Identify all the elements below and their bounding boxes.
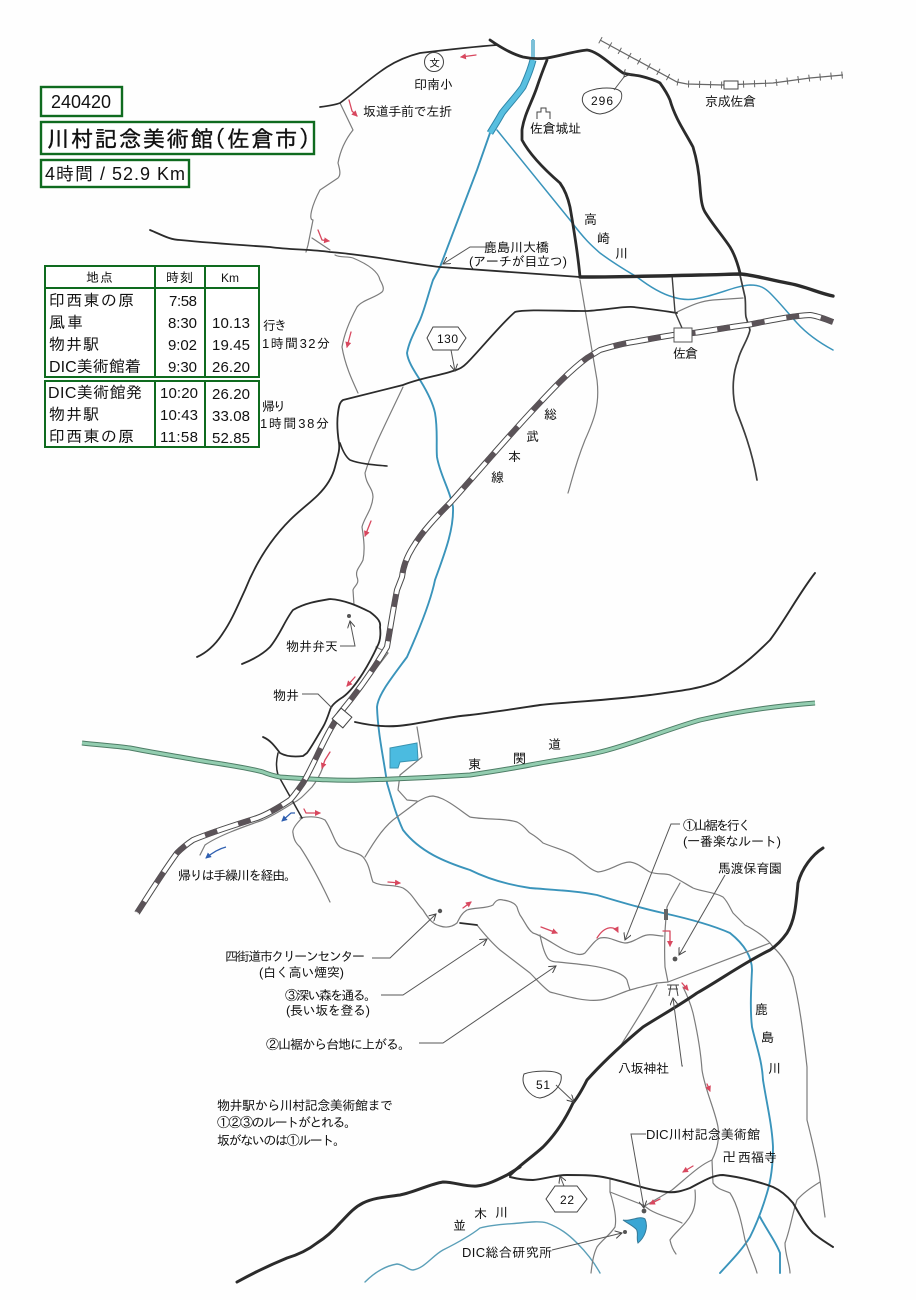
note: return time: 帰り [262, 399, 286, 414]
blue return arrows [206, 813, 295, 858]
map labels: 馬渡保育園 [718, 861, 782, 876]
table: trip log: 9:02 [168, 337, 197, 354]
table: trip log: 物井駅 [49, 406, 99, 424]
icon: Saifukuji temple: 卍 [722, 1149, 736, 1165]
note: outbound time: 1時間32分 [262, 336, 330, 351]
map labels: 西福寺 [738, 1150, 777, 1165]
map labels: 物井 [273, 688, 299, 703]
table: trip log: 11:58 [160, 429, 198, 446]
pond near Tokan road [390, 743, 418, 768]
table: trip log: 10:43 [160, 407, 198, 424]
rectangle: bridge [664, 909, 668, 920]
table: trip log: 33.08 [212, 408, 250, 425]
table: trip log: 52.85 [212, 430, 250, 447]
map labels: 帰りは手繰川を経由。 [178, 868, 297, 883]
table: trip log: 地点 [86, 270, 113, 285]
map labels: 川 [615, 246, 628, 261]
duration box: 4時間 / 52.9 Km [45, 164, 185, 184]
pond near DIC museum [623, 1218, 646, 1243]
map labels: 関 [513, 751, 526, 766]
map labels [178, 77, 782, 1260]
table: trip log: 印西東の原 [49, 429, 134, 446]
route 130 badge [427, 327, 466, 350]
river: Namiki river [365, 1222, 600, 1282]
station: Keisei Sakura [724, 81, 738, 89]
map labels: 坂道手前で左折 [363, 104, 452, 119]
route 51 badge: 51 [536, 1078, 550, 1092]
map labels: ②山裾から台地に上がる。 [266, 1037, 411, 1052]
markers: facility dots [347, 614, 677, 1234]
map labels: ①②③のルートがとれる。 [217, 1115, 357, 1130]
map labels: 鹿 [755, 1002, 768, 1017]
road: thin grey paths [200, 103, 825, 1273]
road: medium black roads [150, 45, 833, 1247]
map labels: 総 [544, 407, 557, 422]
map labels: 佐倉 [673, 346, 698, 361]
table: trip log [45, 266, 259, 447]
railway: Sobu line [137, 315, 833, 913]
table: trip log: 物井駅 [49, 336, 99, 354]
note: return time: 1時間38分 [260, 416, 329, 431]
red route arrows [304, 55, 710, 1204]
map labels: 道 [548, 737, 561, 752]
map labels: 佐倉城址 [530, 121, 581, 136]
table: trip log: 26.20 [212, 359, 250, 376]
river: Takasaki river [497, 130, 833, 350]
map labels: 八坂神社 [618, 1061, 669, 1076]
table: trip log: 19.45 [212, 337, 250, 354]
map labels: 印南小 [414, 77, 453, 92]
map labels: 川 [768, 1061, 781, 1076]
route 296 badge: 296 [591, 94, 613, 108]
date box: 240420 [51, 92, 111, 112]
map labels: 並 [453, 1218, 466, 1233]
road: thick national routes [237, 40, 833, 1282]
table: trip log: DIC美術館着 [49, 358, 141, 376]
route 22 badge: 22 [560, 1193, 574, 1207]
map labels: ①山裾を行く [683, 818, 751, 833]
table: trip log: 26.20 [212, 386, 250, 403]
map labels: ③深い森を通る。 [285, 988, 377, 1003]
table: trip log: 10:20 [160, 385, 198, 402]
map labels: 本 [508, 449, 521, 464]
route 22 badge [546, 1186, 587, 1212]
railway: Keisei line [600, 40, 843, 85]
icon: school [424, 52, 444, 72]
table: trip log: 8:30 [168, 315, 197, 332]
leader lines [302, 77, 725, 1250]
table: trip log: Km [221, 271, 239, 285]
map labels: 物井駅から川村記念美術館まで [217, 1098, 393, 1113]
title box: 川村記念美術館(佐倉市) [47, 127, 310, 150]
map labels: 東 [468, 757, 481, 772]
icon: Sakura castle ruin [537, 108, 550, 119]
map labels: 鹿島川大橋 [484, 240, 549, 255]
table: trip log: 7:58 [169, 293, 197, 310]
map labels: 武 [526, 429, 539, 444]
map labels: 坂がないのは①ルート。 [217, 1133, 346, 1148]
map labels: DIC川村記念美術館 [646, 1127, 760, 1142]
route 130 badge: 130 [437, 332, 458, 346]
note: outbound time [262, 318, 330, 351]
table: trip log: DIC美術館発 [48, 384, 142, 402]
map labels: (一番楽なルート) [683, 834, 781, 849]
icon: school: 文 [429, 58, 440, 70]
map labels: 線 [491, 470, 504, 485]
route 296 badge [582, 88, 622, 114]
map labels: (アーチが目立つ) [469, 254, 567, 269]
map labels: 川 [495, 1205, 508, 1220]
date box [41, 87, 122, 116]
table: trip log: 10.13 [212, 315, 250, 332]
table: trip log: 時刻 [166, 270, 193, 285]
map labels: 島 [761, 1030, 774, 1045]
map labels: 物井弁天 [286, 639, 338, 654]
river: Kashima river [377, 40, 780, 1273]
note: outbound time: 行き [263, 318, 287, 333]
route 51 badge [523, 1071, 561, 1098]
map labels: 京成佐倉 [705, 94, 756, 109]
table: trip log: 風車 [49, 315, 83, 332]
table: trip log: 印西東の原 [49, 293, 134, 310]
map labels: 四街道市クリーンセンター [225, 949, 365, 964]
expressway: Tokan road [82, 703, 815, 780]
icon: Yasaka shrine torii [667, 985, 679, 996]
map labels: (長い坂を登る) [286, 1003, 370, 1018]
map labels: 崎 [597, 231, 610, 246]
station: Monoi [332, 708, 352, 728]
map labels: (白く高い煙突) [259, 965, 344, 980]
table: trip log: 9:30 [168, 359, 197, 376]
map labels: DIC総合研究所 [462, 1245, 552, 1260]
note: return time [260, 399, 329, 431]
title box [41, 122, 314, 154]
station: Sakura [674, 328, 692, 342]
map labels: 木 [474, 1206, 487, 1221]
map labels: 高 [584, 212, 597, 227]
